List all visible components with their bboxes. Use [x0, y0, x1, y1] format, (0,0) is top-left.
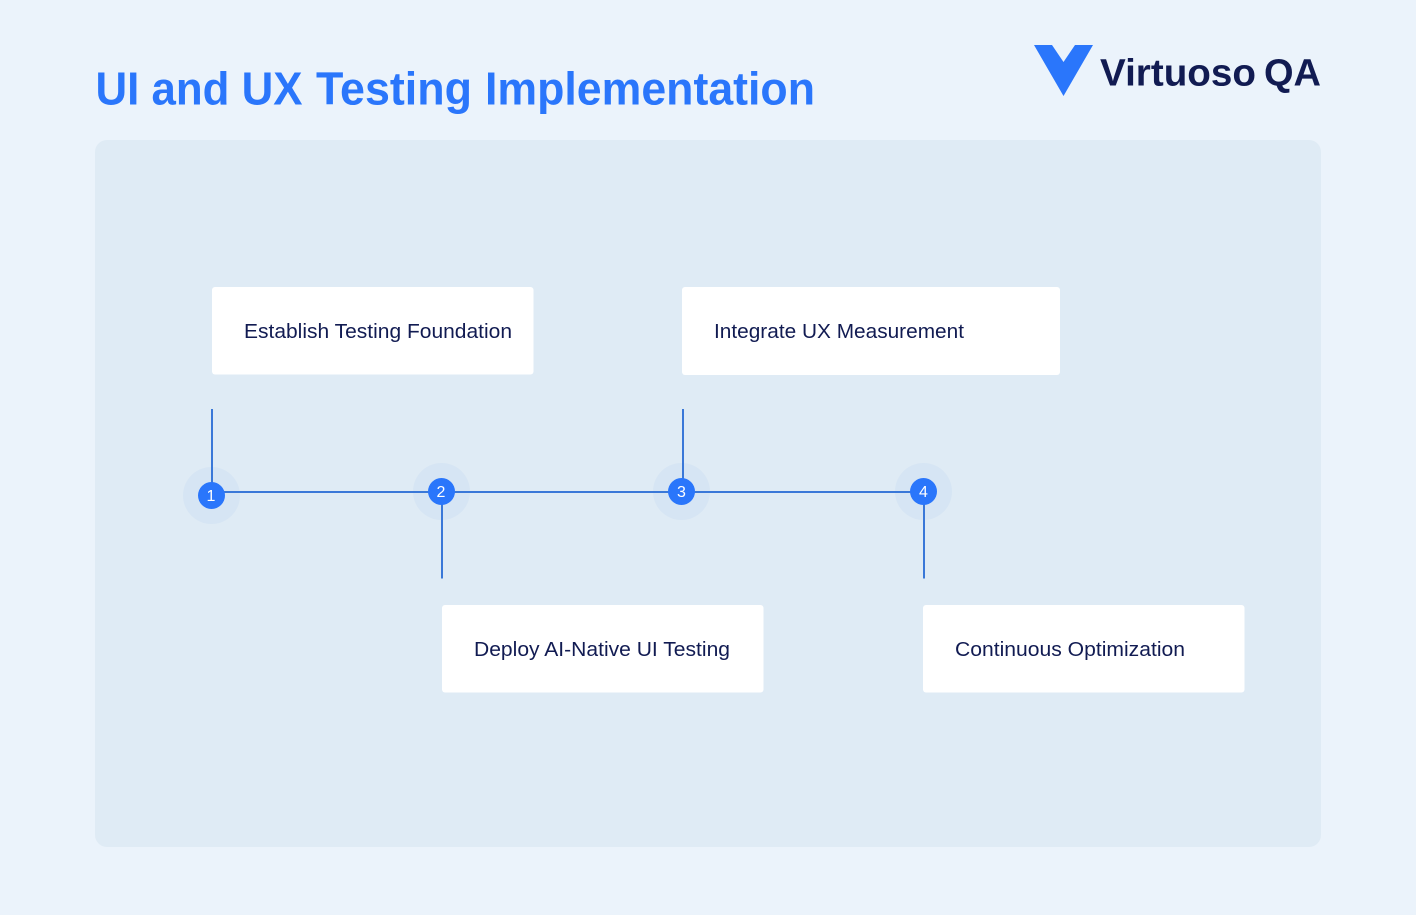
step card 3: Integrate UX Measurement: Integrate UX Measurement: [714, 321, 964, 343]
step card 3: Integrate UX Measurement: [682, 287, 1060, 375]
logo: Virtuoso QA: [1034, 45, 1321, 96]
step marker 3: [668, 478, 695, 505]
step marker 4: 4: [919, 484, 928, 501]
timeline connector lines: [212, 409, 924, 578]
step marker 3: 3: [677, 484, 686, 501]
node halos: [183, 463, 952, 524]
step marker 2: [428, 478, 455, 505]
step card 1: Establish Testing Foundation: Establish Testing Foundation: [244, 321, 512, 343]
step card 4: Continuous Optimization: [923, 605, 1244, 692]
title: UI and UX: [96, 62, 303, 114]
logo wordmark: [1100, 52, 1321, 94]
logo wordmark: Virtuoso: [1100, 52, 1256, 94]
step card 2: Deploy AI-Native UI Testing: [442, 605, 764, 692]
step marker 1: 1: [207, 488, 216, 505]
title: Implementation: [485, 62, 815, 114]
logo wordmark: QA: [1264, 52, 1321, 94]
step marker 1: [198, 482, 225, 509]
step marker 2: 2: [437, 484, 446, 501]
icon: logo V mark: [1034, 45, 1093, 96]
step card 2: Deploy AI-Native UI Testing: Deploy AI-Native UI Testing: [474, 639, 730, 661]
title: Testing: [316, 62, 472, 114]
step card 4: Continuous Optimization: Continuous Optimization: [955, 639, 1185, 661]
title: [96, 62, 815, 114]
panel: timeline background: [95, 140, 1321, 847]
step marker 4: [910, 478, 937, 505]
step card 1: Establish Testing Foundation: [212, 287, 534, 374]
